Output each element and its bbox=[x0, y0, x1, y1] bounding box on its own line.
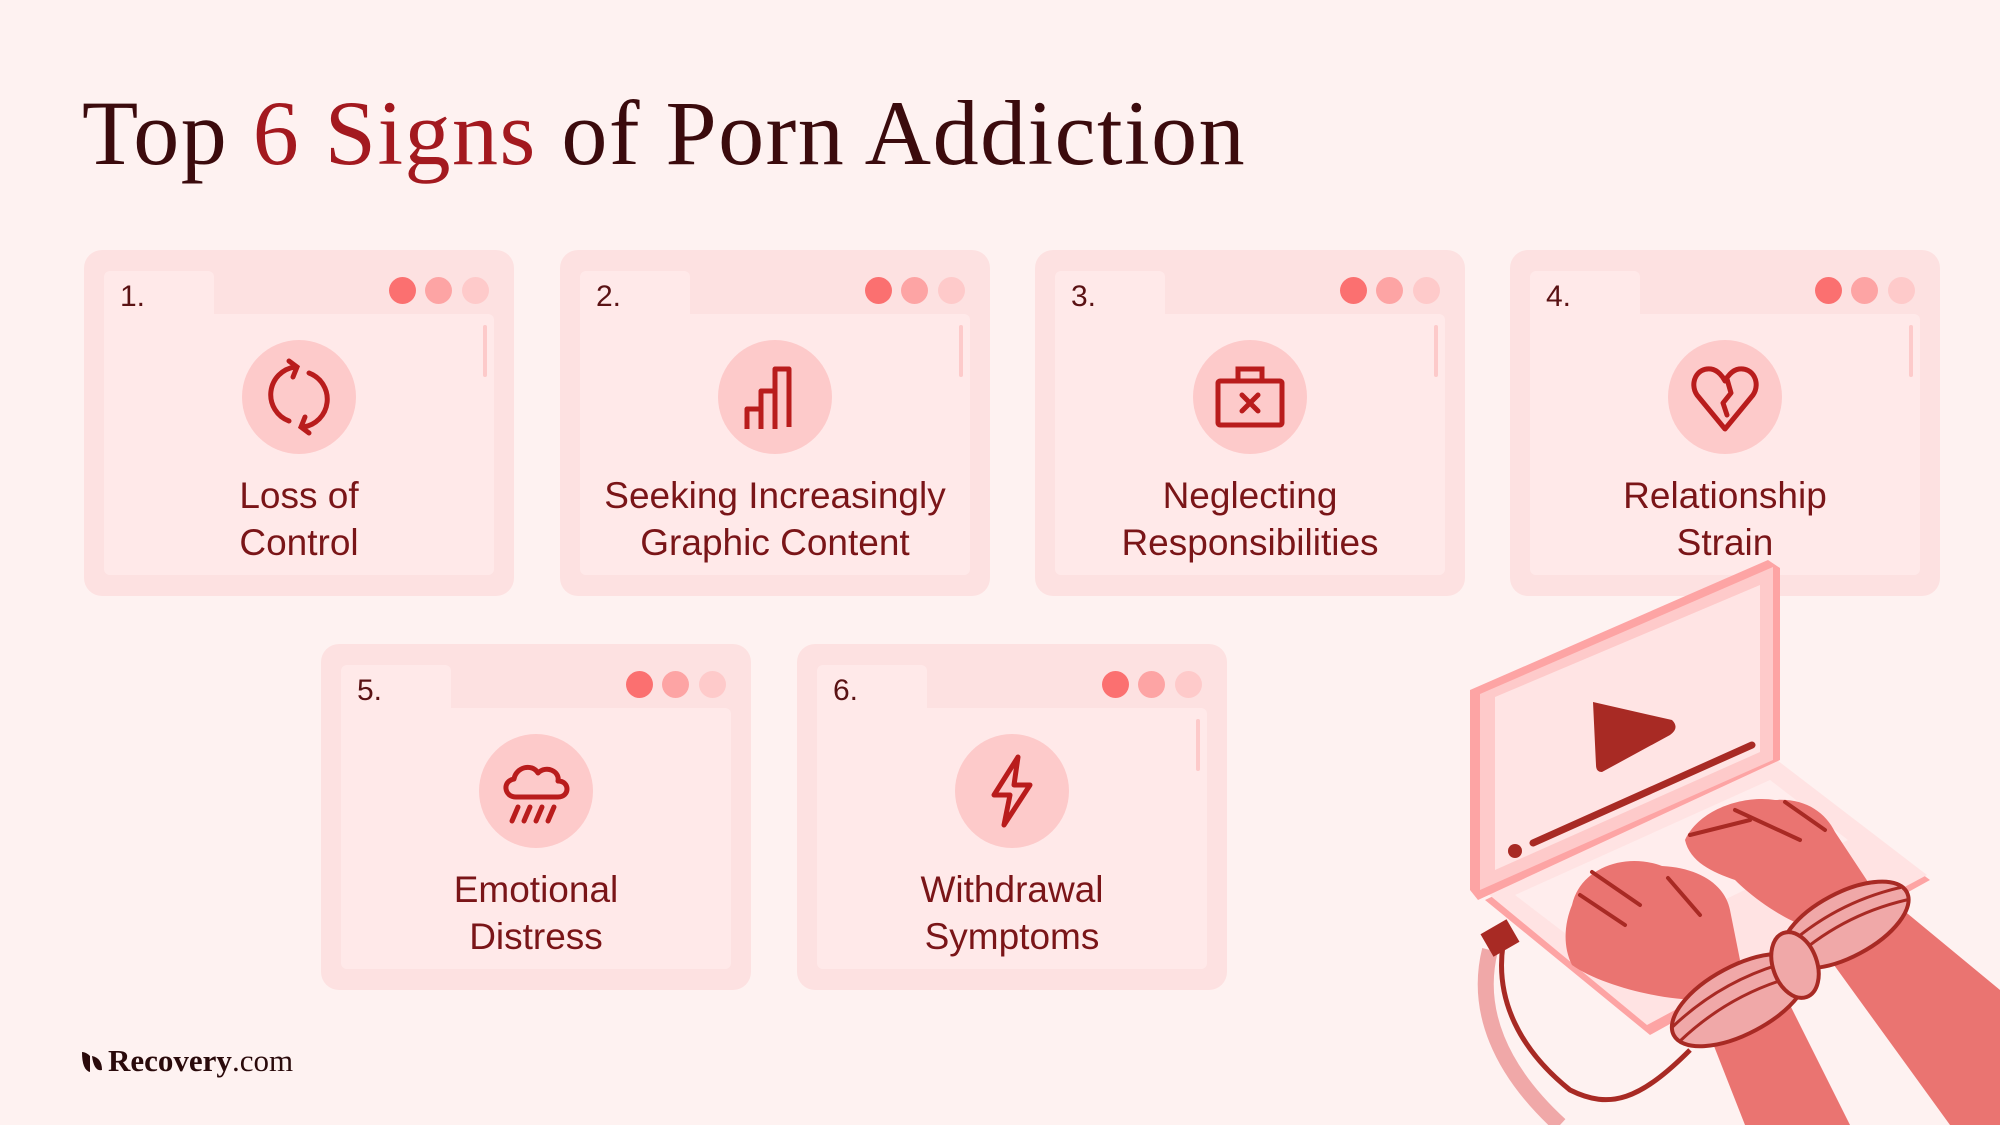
icon: lightning bbox=[955, 734, 1069, 848]
card 5: emotional distress bbox=[321, 644, 751, 990]
card 3: neglecting responsibilities bbox=[1035, 250, 1465, 596]
card 3: neglecting responsibilities: 3. bbox=[1071, 280, 1096, 313]
left arm bbox=[1690, 955, 1850, 1125]
card 1: loss of control: 1. bbox=[120, 280, 145, 313]
card 2: graphic content: 2. bbox=[596, 280, 621, 313]
card 5: emotional distress: 5. bbox=[357, 674, 382, 707]
right hand bbox=[1685, 799, 1870, 935]
card 3: neglecting responsibilities: Responsibilities bbox=[1121, 522, 1379, 563]
card 5: emotional distress: Emotional bbox=[454, 869, 618, 910]
card 1: loss of control: Control bbox=[239, 522, 359, 563]
card 2: graphic content: Seeking Increasingly bbox=[604, 475, 946, 516]
card 2: graphic content bbox=[560, 250, 990, 596]
icon: broken heart bbox=[1668, 340, 1782, 454]
right arm bbox=[1805, 895, 2000, 1125]
icon: rain cloud bbox=[479, 734, 593, 848]
card 4: relationship strain: Relationship bbox=[1623, 475, 1827, 516]
card 6: withdrawal symptoms: 6. bbox=[833, 674, 858, 707]
card 6: withdrawal symptoms: Withdrawal bbox=[920, 869, 1104, 910]
logo bbox=[82, 1043, 293, 1078]
cable bbox=[1486, 950, 1560, 1125]
icon: bar chart bbox=[718, 340, 832, 454]
left hand bbox=[1566, 861, 1740, 1000]
logo: .com bbox=[232, 1043, 293, 1078]
title: Top 6 Signs of Porn Addiction bbox=[82, 82, 1246, 184]
card 4: relationship strain bbox=[1510, 250, 1940, 596]
card 4: relationship strain: 4. bbox=[1546, 280, 1571, 313]
card 6: withdrawal symptoms: Symptoms bbox=[925, 916, 1099, 957]
rope knot bbox=[1763, 926, 1827, 1004]
card 2: graphic content: Graphic Content bbox=[640, 522, 910, 563]
card 1: loss of control bbox=[84, 250, 514, 596]
icon: briefcase x bbox=[1193, 340, 1307, 454]
card 6: withdrawal symptoms bbox=[797, 644, 1227, 990]
logo: Recovery bbox=[108, 1043, 232, 1078]
screen bbox=[1470, 560, 1780, 900]
card 1: loss of control: Loss of bbox=[239, 475, 359, 516]
card 4: relationship strain: Strain bbox=[1677, 522, 1773, 563]
card 5: emotional distress: Distress bbox=[469, 916, 603, 957]
icon: refresh bbox=[242, 340, 356, 454]
rope: right cuff bbox=[1768, 864, 1922, 986]
card 3: neglecting responsibilities: Neglecting bbox=[1163, 475, 1337, 516]
play button bbox=[1593, 702, 1676, 772]
base bbox=[1485, 763, 1930, 1035]
rope: left cuff bbox=[1658, 935, 1822, 1065]
